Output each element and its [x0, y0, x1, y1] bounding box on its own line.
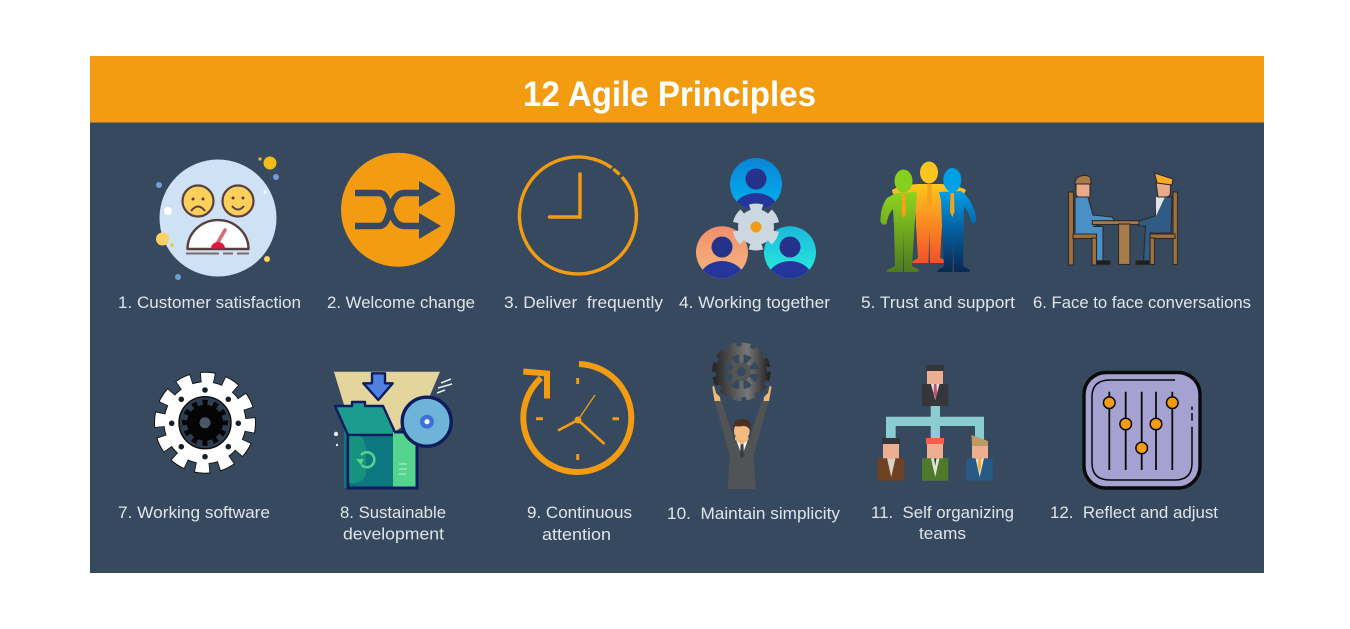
principle 12 [1050, 372, 1218, 522]
label: 3. Deliver frequently [504, 294, 664, 312]
label: 5. Trust and support [861, 294, 1015, 312]
label: 1. Customer satisfaction [118, 294, 301, 312]
dark panel background [90, 122, 1264, 573]
icon: adjustment sliders [1084, 372, 1200, 488]
icon: team around gear [696, 158, 816, 278]
label: 4. Working together [679, 294, 831, 312]
principle 2 [327, 153, 475, 312]
icon: recycled box with disc [334, 372, 452, 488]
label: 12. Reflect and adjust [1050, 504, 1218, 522]
icon: businessman lifting gear [712, 345, 772, 489]
principle 1 [118, 156, 301, 312]
principle 7 [118, 376, 270, 522]
principle 4 [679, 158, 831, 312]
label: 11. Self organizing [871, 504, 1014, 522]
label: 7. Working software [118, 504, 270, 522]
principle 6 [1033, 173, 1251, 312]
icon: white gear [158, 376, 252, 469]
label: 10. Maintain simplicity [667, 505, 841, 523]
label: 9. Continuous [527, 504, 632, 522]
principle 9 [523, 364, 632, 544]
principle 11 [871, 365, 1014, 543]
icon: organization chart [878, 365, 993, 481]
icon: three colleagues embracing [880, 162, 976, 272]
principle 5 [861, 162, 1015, 312]
label: attention [542, 526, 611, 544]
label: 6. Face to face conversations [1033, 294, 1251, 312]
label: development [343, 526, 444, 544]
label: 2. Welcome change [327, 294, 475, 312]
label: 8. Sustainable [340, 504, 446, 522]
title banner [90, 56, 1264, 122]
icon: satisfaction gauge [156, 156, 279, 280]
principle 3 [504, 157, 664, 312]
icon: clock outline [519, 157, 636, 274]
principle 8 [334, 372, 452, 544]
label [340, 504, 446, 544]
icon: two people at a table [1068, 173, 1178, 265]
label [871, 504, 1014, 543]
principle 10 [667, 345, 841, 523]
title: 12 Agile Principles [523, 75, 816, 114]
infographic canvas [90, 56, 1264, 573]
icon: clock with refresh arrow [523, 364, 631, 472]
label [527, 504, 632, 544]
icon: shuffle arrows [341, 153, 455, 267]
label: teams [919, 525, 966, 543]
